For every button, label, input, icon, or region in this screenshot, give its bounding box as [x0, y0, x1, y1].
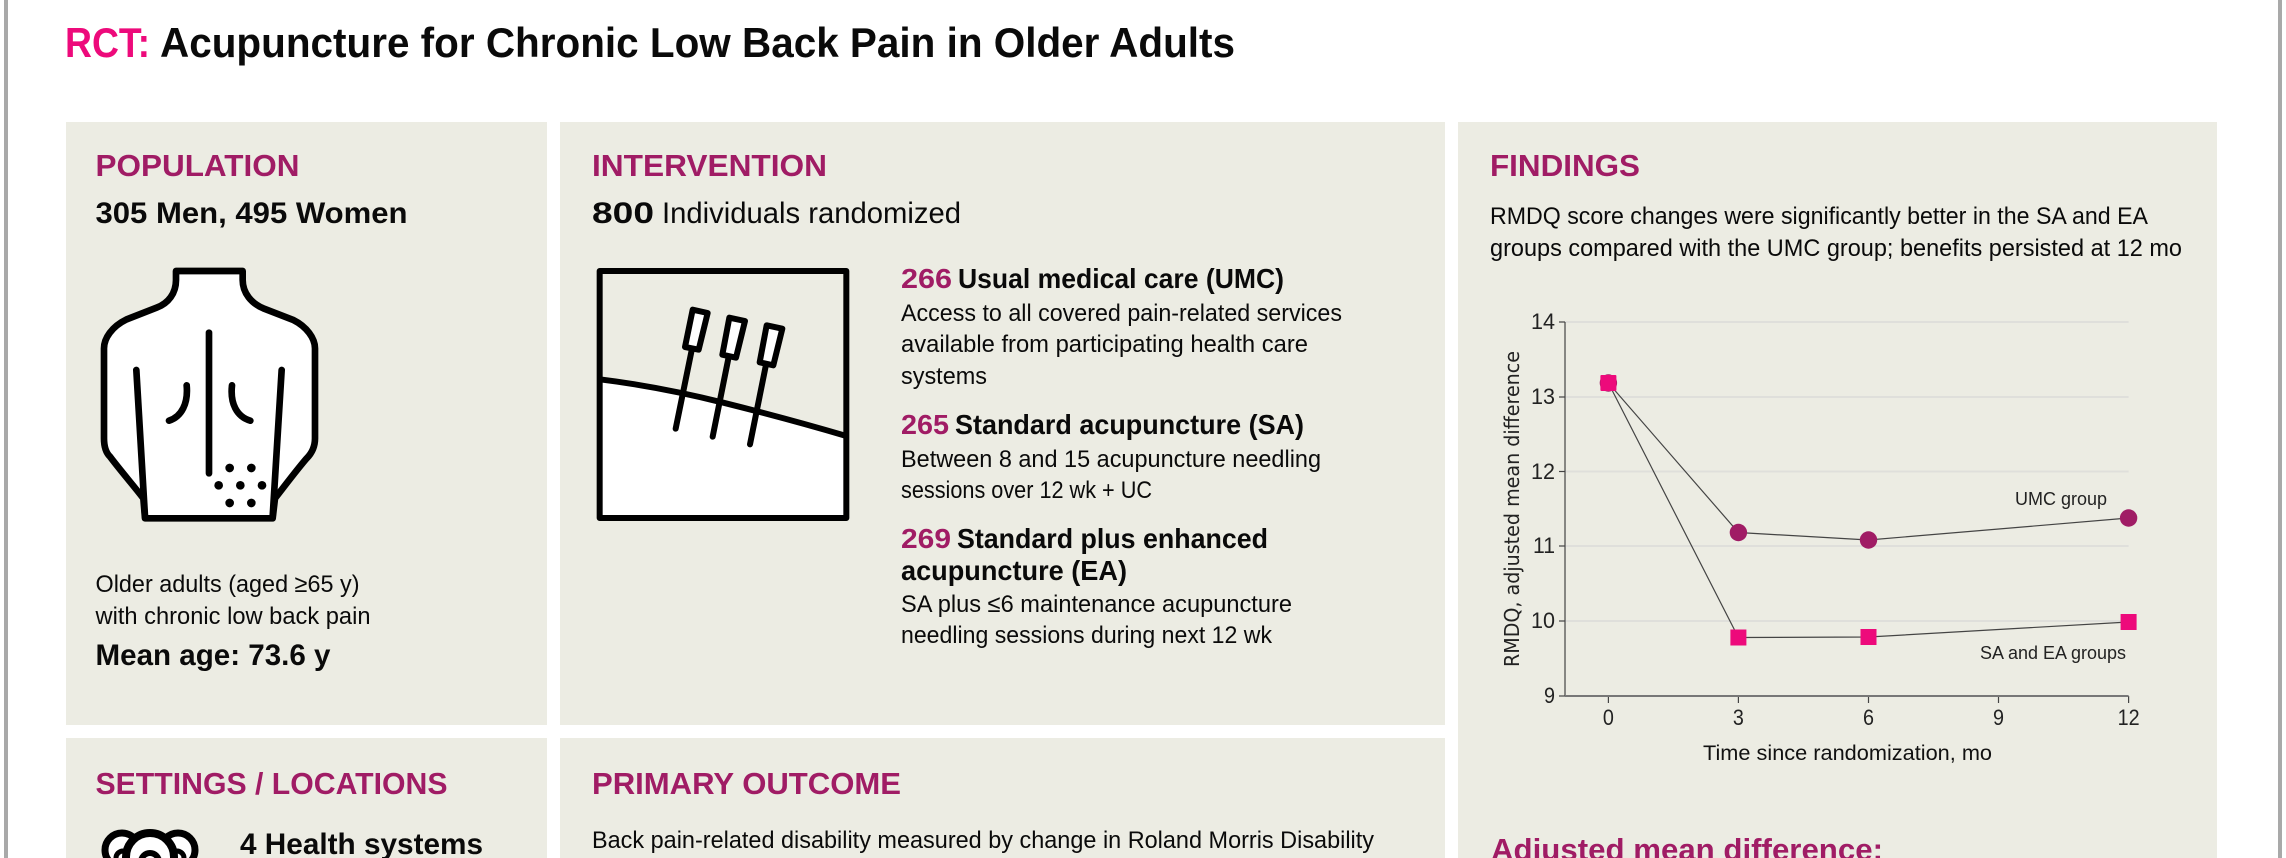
x axis title: Time since randomization, mo: [1703, 742, 1992, 765]
arm: usual medical care: 266: [901, 263, 952, 294]
population description: [95, 571, 371, 630]
panel: intervention: [560, 122, 1445, 725]
heading: population: POPULATION: [96, 148, 300, 183]
x axis labels: 3: [1733, 705, 1744, 730]
arm: standard acupuncture: sessions over 12 wk + UC: [901, 477, 1152, 504]
heading: primary outcome: PRIMARY OUTCOME: [592, 766, 901, 801]
arm: standard acupuncture: Between 8 and 15 acupuncture needling: [901, 446, 1321, 473]
mean age: Mean age: 73.6 y: [96, 639, 331, 672]
randomized count: Individuals randomized: [662, 197, 961, 230]
panel: settings / locations: [66, 738, 547, 858]
x axis labels: 6: [1863, 705, 1874, 730]
y axis title: RMDQ, adjusted mean difference: [1500, 351, 1524, 667]
title: RCT:: [65, 19, 150, 66]
y axis labels: 12: [1531, 459, 1555, 484]
primary outcome description: Back pain-related disability measured by change in Roland Morris Disability: [592, 827, 1375, 854]
y axis labels: 13: [1531, 384, 1555, 409]
y axis labels: 10: [1531, 608, 1555, 633]
y axis labels: 14: [1531, 309, 1555, 334]
arm: standard plus enhanced acupuncture: 269: [901, 523, 951, 554]
arm: usual medical care: Access to all covered pain-related services: [901, 300, 1342, 327]
y axis labels: 9: [1544, 683, 1555, 708]
icon: human back with lower back pain: [104, 271, 315, 518]
arm: usual medical care: Usual medical care (UMC): [958, 263, 1284, 294]
findings summary: RMDQ score changes were significantly better in the SA and EA: [1490, 203, 2149, 230]
line chart: RMDQ over time: [1500, 309, 2140, 765]
panel: primary outcome: [560, 738, 1445, 858]
arm: usual medical care: systems: [901, 363, 987, 390]
findings summary: [1490, 203, 2182, 262]
population description: Older adults (aged ≥65 y): [96, 571, 360, 598]
panel: findings: [1458, 122, 2217, 858]
title: Acupuncture for Chronic Low Back Pain in Older Adults: [160, 19, 1235, 66]
icon: linked rings: [105, 833, 195, 858]
population description: with chronic low back pain: [95, 603, 371, 630]
arm: standard acupuncture: [901, 409, 1321, 504]
heading: findings: FINDINGS: [1490, 148, 1640, 183]
arm: standard acupuncture: 265: [901, 409, 949, 440]
label: UMC group: UMC group: [2015, 488, 2107, 509]
x axis labels: 0: [1603, 705, 1614, 730]
panel: population: [66, 122, 547, 725]
icon: acupuncture needles in skin: [600, 271, 846, 518]
x axis labels: [1603, 705, 2140, 730]
arm: usual medical care: [901, 263, 1342, 390]
x axis labels: 9: [1993, 705, 2004, 730]
heading: settings: SETTINGS / LOCATIONS: [96, 766, 448, 801]
arm: standard plus enhanced acupuncture: needling sessions during next 12 wk: [901, 622, 1273, 649]
arm: standard acupuncture: Standard acupuncture (SA): [955, 409, 1304, 440]
y axis labels: [1531, 309, 1555, 708]
arm: standard plus enhanced acupuncture: [901, 523, 1292, 649]
heading: intervention: INTERVENTION: [592, 148, 827, 183]
arm: usual medical care: available from participating health care: [901, 331, 1308, 358]
arm: standard plus enhanced acupuncture: SA plus ≤6 maintenance acupuncture: [901, 591, 1292, 618]
series: UMC group: [1600, 374, 2137, 549]
arm: standard plus enhanced acupuncture: acupuncture (EA): [901, 555, 1127, 586]
x axis labels: 12: [2118, 705, 2140, 730]
y axis labels: 11: [1533, 533, 1555, 558]
findings summary: groups compared with the UMC group; benefits persisted at 12 mo: [1490, 235, 2182, 262]
label: SA and EA groups: SA and EA groups: [1980, 642, 2126, 663]
arm: standard plus enhanced acupuncture: Standard plus enhanced: [957, 523, 1268, 554]
population counts: 305 Men, 495 Women: [96, 197, 408, 230]
series: SA and EA groups: [1600, 375, 2137, 646]
randomized count: 800: [592, 197, 654, 230]
